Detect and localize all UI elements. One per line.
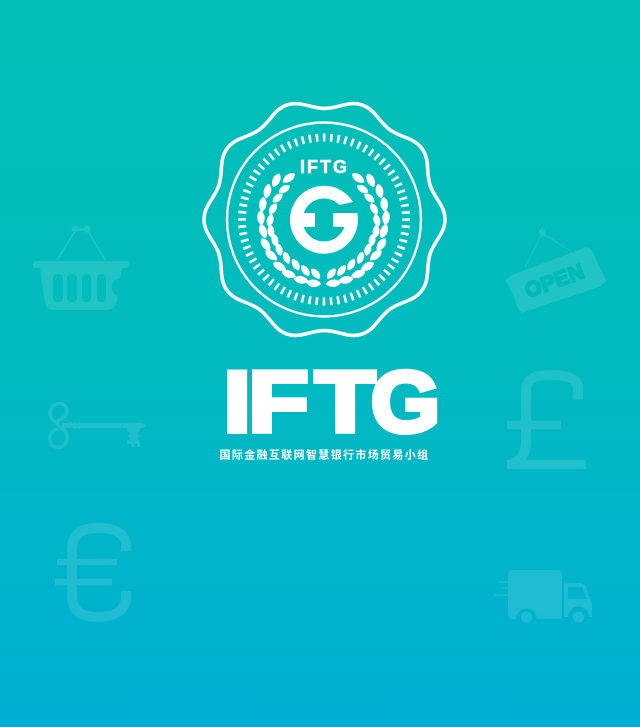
badge: left laurel branch: [257, 171, 322, 288]
icon: hanging open sign: [505, 227, 607, 313]
badge: tick ring: [242, 138, 406, 302]
badge: right laurel branch: [325, 171, 390, 288]
icon: pound sign: [507, 375, 586, 464]
badge: IFTG label: IFTG: [300, 157, 349, 177]
badge: scalloped outer border: [204, 94, 445, 345]
badge emblem: [204, 94, 445, 345]
wordmark: IFTG: G: [371, 354, 440, 450]
icon: shopping basket: [33, 226, 129, 310]
icon: euro sign: [55, 528, 126, 617]
icon: antique key: [50, 404, 147, 447]
wordmark: IFTG: IFT: [223, 354, 375, 450]
badge: inner ring: [227, 122, 421, 316]
icon: delivery truck: [494, 570, 592, 622]
badge: central G monogram: [290, 186, 358, 254]
subtitle: 国际金融互联网智慧银行市场贸易小组: [220, 448, 429, 462]
sign lettering: OPEN: [522, 260, 588, 303]
